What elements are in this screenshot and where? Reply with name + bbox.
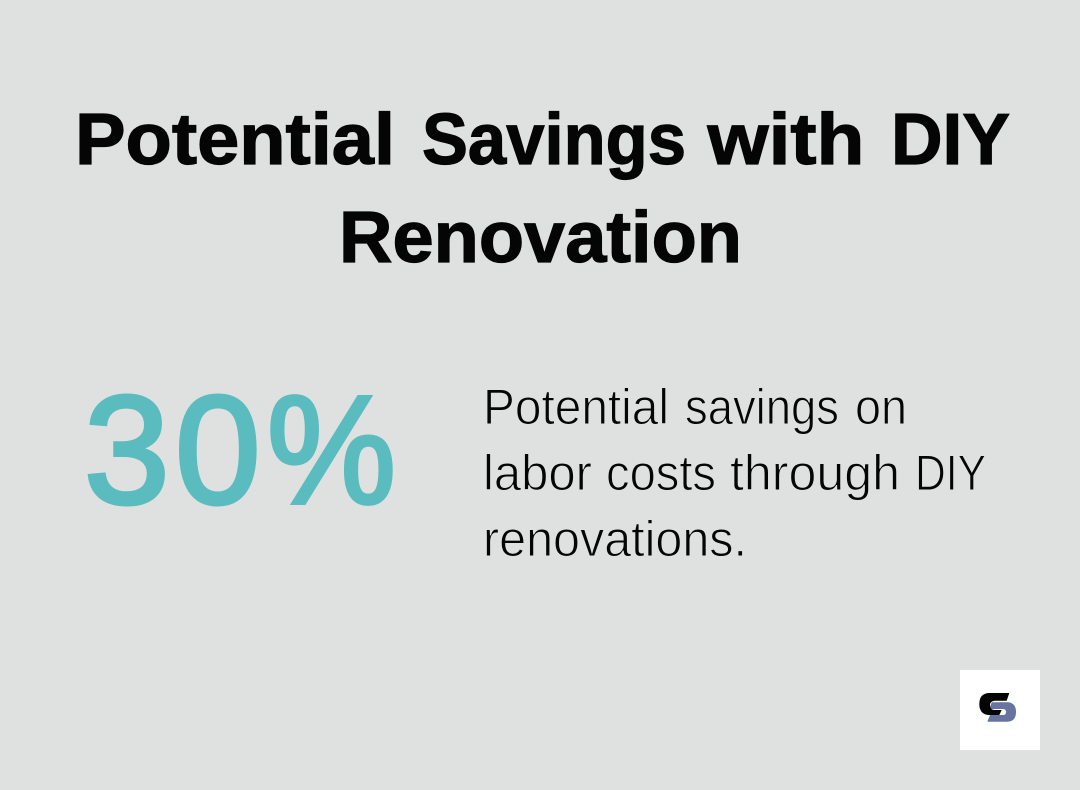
description text: DIY bbox=[915, 445, 986, 501]
logo badge bbox=[960, 670, 1040, 750]
statistic: 30%: % bbox=[267, 364, 396, 536]
title: DIY bbox=[891, 100, 1010, 180]
description text: savings bbox=[685, 379, 839, 435]
title: with bbox=[706, 100, 864, 180]
icon: logo mark, black part bbox=[979, 693, 1009, 715]
title: Renovation bbox=[339, 198, 742, 278]
title: Savings bbox=[422, 100, 686, 180]
statistic: 30% bbox=[84, 364, 396, 536]
description text: on bbox=[855, 379, 907, 435]
icon: logo mark, blue part bbox=[987, 702, 1016, 722]
description text: labor bbox=[483, 445, 592, 501]
description text: renovations. bbox=[483, 511, 747, 567]
description text: through bbox=[730, 445, 900, 501]
statistic: 30%: 0 bbox=[175, 364, 261, 536]
title bbox=[75, 100, 1010, 278]
description text: Potential bbox=[483, 379, 669, 435]
statistic: 30%: 3 bbox=[84, 364, 170, 536]
title: Potential bbox=[75, 100, 395, 180]
description text bbox=[483, 379, 986, 567]
description text: costs bbox=[606, 445, 716, 501]
